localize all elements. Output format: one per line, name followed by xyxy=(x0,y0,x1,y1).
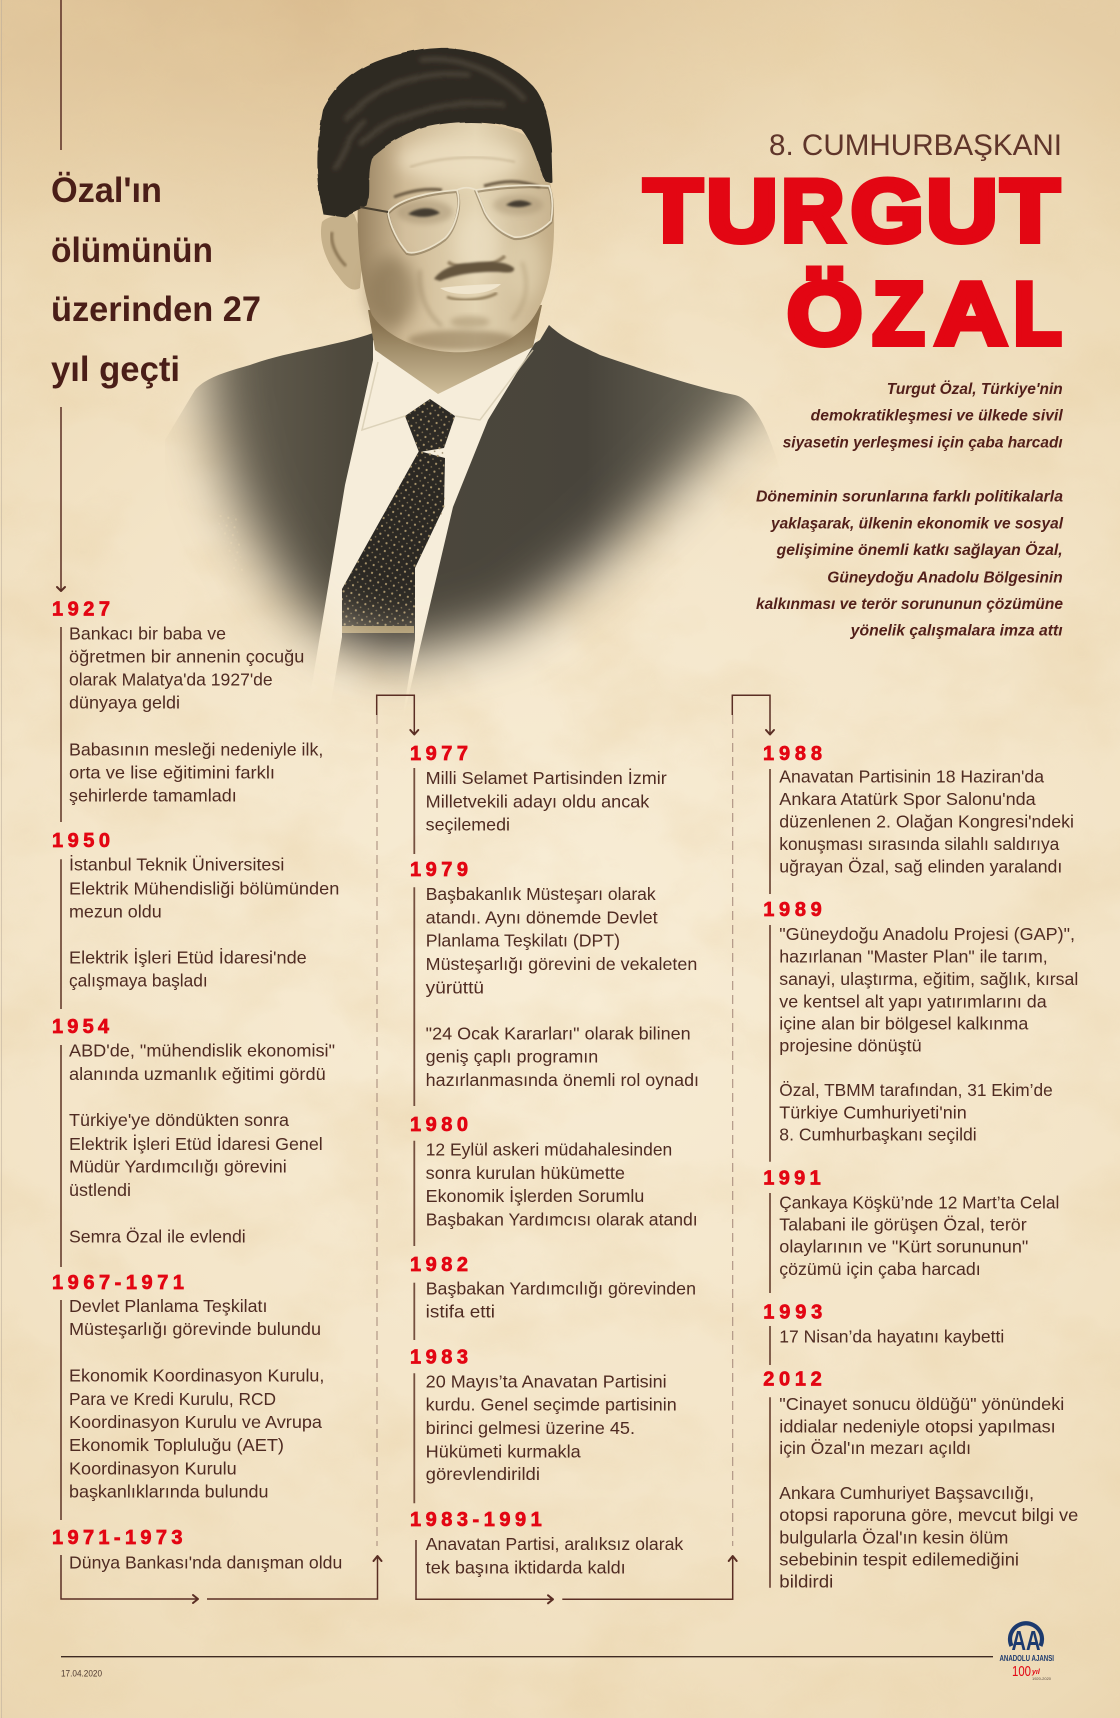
entry: 2012: 2012 xyxy=(763,1368,822,1390)
entry: 1971-1973 xyxy=(52,1527,342,1572)
entry: 1954: Türkiye'ye döndükten sonra xyxy=(69,1110,289,1130)
entry: 1982: Başbakan Yardımcılığı görevinden xyxy=(426,1278,696,1298)
text block: introduction: yaklaşarak, ülkenin ekonomik ve sosyal xyxy=(770,515,1064,532)
text block: introduction: Güneydoğu Anadolu Bölgesinin xyxy=(827,569,1063,586)
entry: 1983: kurdu. Genel seçimde partisinin xyxy=(426,1395,677,1415)
photo: mustache and mouth xyxy=(434,262,514,300)
text block: introduction: gelişimine önemli katkı sağlayan Özal, xyxy=(776,540,1063,559)
logo: Anadolu Ajansı 100 yıl: ANADOLU AJANSI xyxy=(1000,1653,1054,1663)
entry: 1991: 1991 xyxy=(763,1168,821,1190)
entry: 1927: orta ve lise eğitimini farklı xyxy=(69,763,275,783)
entry: 1991 xyxy=(763,1168,1059,1293)
text block: introduction: demokratikleşmesi ve ülkede sivil xyxy=(811,408,1063,425)
entry: 1979: Müsteşarlığı görevini de vekaleten xyxy=(426,954,697,974)
text block: introduction: kalkınması ve terör sorununun çözümüne xyxy=(756,596,1063,613)
entry: 1977: Milletvekili adayı oldu ancak xyxy=(426,791,649,811)
entry: 1954: Elektrik İşleri Etüd İdaresi Genel xyxy=(69,1134,323,1154)
entry: 1983-1991: 1983-1991 xyxy=(410,1509,542,1531)
entry: 1979: geniş çaplı programın xyxy=(426,1047,598,1067)
entry: 1988: uğrayan Özal, sağ elinden yaralandı xyxy=(779,857,1062,877)
entry: 1988: düzenlenen 2. Olağan Kongresi'ndeki xyxy=(779,812,1074,832)
entry: 1991: Çankaya Köşkü’nde 12 Mart’ta Celal xyxy=(779,1192,1059,1212)
heading: anniversary text: üzerinden 27 xyxy=(51,290,261,329)
entry: 1988: Ankara Atatürk Spor Salonu'nda xyxy=(779,789,1036,809)
entry: 1993 xyxy=(763,1302,1004,1365)
photo: face xyxy=(358,122,554,352)
entry: 1993: 17 Nisan’da hayatını kaybetti xyxy=(779,1326,1004,1346)
entry: 1988: 1988 xyxy=(763,743,822,765)
arrow: column 2 to column 3 xyxy=(416,695,774,1603)
panel: timeline column 3 xyxy=(763,743,1078,1592)
title: Turgut Özal: Ö xyxy=(787,264,862,363)
entry: 1989: ve kentsel alt yapı yatırımlarını da xyxy=(779,991,1047,1011)
entry: 1983: görevlendirildi xyxy=(426,1464,540,1484)
entry: 1971-1973: 1971-1973 xyxy=(52,1527,182,1549)
title: Turgut Özal: R xyxy=(781,161,844,260)
entry: 1989 xyxy=(763,899,1078,1162)
text block: introduction: yönelik çalışmalara imza attı xyxy=(850,623,1063,640)
title: Turgut Özal: U xyxy=(706,161,778,260)
entry: 2012: iddialar nedeniyle otopsi yapılması xyxy=(779,1416,1056,1436)
entry: 1983-1991: tek başına iktidarda kaldı xyxy=(426,1557,626,1577)
entry: 1954: üstlendi xyxy=(69,1180,131,1200)
entry: 1967-1971: Koordinasyon Kurulu ve Avrupa xyxy=(69,1412,322,1432)
entry: 1967-1971: Ekonomik Koordinasyon Kurulu, xyxy=(69,1366,324,1386)
entry: 1989: 8. Cumhurbaşkanı seçildi xyxy=(779,1125,977,1145)
heading: anniversary text: ölümünün xyxy=(51,231,213,270)
entry: 1983 xyxy=(410,1346,677,1503)
panel: timeline column 1 xyxy=(52,598,342,1572)
entry: 1954: alanında uzmanlık eğitimi gördü xyxy=(69,1064,326,1084)
entry: 1979: atandı. Aynı dönemde Devlet xyxy=(426,907,658,927)
entry: 1950: mezun oldu xyxy=(69,901,162,921)
entry: 1991: Talabani ile görüşen Özal, terör xyxy=(779,1215,1027,1235)
photo: neck xyxy=(368,305,542,394)
photo: portrait of Turgut Özal xyxy=(165,48,790,720)
entry: 1980: 1980 xyxy=(410,1114,468,1136)
entry: 1927: 1927 xyxy=(52,598,110,620)
entry: 1988: konuşması sırasında silahlı saldırıya xyxy=(779,834,1059,854)
entry: 1988: Anavatan Partisinin 18 Haziran'da xyxy=(779,767,1044,787)
entry: 1983: birinci gelmesi üzerine 45. xyxy=(426,1418,635,1438)
title: Turgut Özal: U xyxy=(926,161,998,260)
entry: 1927: öğretmen bir annenin çocuğu xyxy=(69,647,304,667)
entry: 1971-1973: Dünya Bankası'nda danışman oldu xyxy=(69,1552,342,1572)
entry: 1950: çalışmaya başladı xyxy=(69,971,208,991)
text block: introduction: siyasetin yerleşmesi için çaba harcadı xyxy=(783,435,1063,452)
heading: anniversary text xyxy=(51,171,261,389)
entry: 1967-1971: başkanlıklarında bulundu xyxy=(69,1482,268,1502)
photo: ear xyxy=(321,214,364,290)
entry: 1989: sanayi, ulaştırma, eğitim, sağlık, kırsal xyxy=(779,969,1078,989)
entry: 2012: bildirdi xyxy=(779,1572,833,1592)
entry: 1950: İstanbul Teknik Üniversitesi xyxy=(69,855,284,875)
entry: 1980: sonra kurulan hükümette xyxy=(426,1163,625,1183)
entry: 1979: Planlama Teşkilatı (DPT) xyxy=(426,931,620,951)
text block: introduction xyxy=(756,379,1064,640)
entry: 1989: içine alan bir bölgesel kalkınma xyxy=(779,1013,1028,1033)
panel: timeline column 2 xyxy=(410,743,699,1577)
entry: 1954: Müdür Yardımcılığı görevini xyxy=(69,1157,287,1177)
entry: 1950: 1950 xyxy=(52,830,110,852)
subtitle: 8. Cumhurbaşkanı: 8. CUMHURBAŞKANI xyxy=(769,129,1062,162)
entry: 1977 xyxy=(410,743,667,854)
entry: 1982 xyxy=(410,1254,696,1340)
logo: Anadolu Ajansı 100 yıl: AA xyxy=(1012,1625,1040,1656)
heading: anniversary text: yıl geçti xyxy=(51,350,180,389)
entry: 1967-1971: Müsteşarlığı görevinde bulundu xyxy=(69,1319,321,1339)
entry: 1967-1971: Ekonomik Topluluğu (AET) xyxy=(69,1435,284,1455)
logo: Anadolu Ajansı 100 yıl: yıl xyxy=(1031,1669,1041,1676)
entry: 1954 xyxy=(52,1016,335,1267)
entry: 1979: hazırlanmasında önemli rol oynadı xyxy=(426,1070,699,1090)
photo: eyebrows and eyes xyxy=(394,182,540,217)
entry: 1983: Hükümeti kurmakla xyxy=(426,1441,581,1461)
entry: 1979 xyxy=(410,859,699,1106)
entry: 1927: şehirlerde tamamladı xyxy=(69,786,237,806)
entry: 2012: bulgularla Özal'ın kesin ölüm xyxy=(779,1527,1008,1547)
title: Turgut Özal: Z xyxy=(873,264,924,363)
entry: 1993: 1993 xyxy=(763,1302,822,1324)
entry: 1977: seçilemedi xyxy=(426,814,510,834)
entry: 1980 xyxy=(410,1114,698,1246)
entry: 1980: Ekonomik İşlerden Sorumlu xyxy=(426,1186,644,1206)
entry: 2012: Ankara Cumhuriyet Başsavcılığı, xyxy=(779,1483,1034,1503)
entry: 1977: Milli Selamet Partisinden İzmir xyxy=(426,768,667,788)
title: Turgut Özal: T xyxy=(644,161,702,260)
entry: 2012: sebebinin tespit edilemediğini xyxy=(779,1550,1019,1570)
entry: 1989: Özal, TBMM tarafından, 31 Ekim’de xyxy=(779,1080,1053,1100)
title: Turgut Özal: T xyxy=(1001,161,1059,260)
title: Turgut Özal: A xyxy=(935,264,1007,363)
entry: 1988 xyxy=(763,743,1074,894)
entry: 1980: Başbakan Yardımcısı olarak atandı xyxy=(426,1209,698,1229)
entry: 1979: Başbakanlık Müsteşarı olarak xyxy=(426,884,656,904)
entry: 1954: Semra Özal ile evlendi xyxy=(69,1226,246,1246)
entry: 1989: hazırlanan "Master Plan" ile tarım, xyxy=(779,946,1048,966)
entry: 1983: 1983 xyxy=(410,1346,468,1368)
logo: Anadolu Ajansı 100 yıl xyxy=(1000,1623,1054,1681)
entry: 1967-1971: Koordinasyon Kurulu xyxy=(69,1458,237,1478)
title: Turgut Özal xyxy=(644,161,1062,363)
date: 17.04.2020 xyxy=(61,1669,102,1680)
entry: 1983-1991: Anavatan Partisi, aralıksız olarak xyxy=(426,1534,683,1554)
entry: 1979: yürüttü xyxy=(426,977,484,997)
entry: 1989: "Güneydoğu Anadolu Projesi (GAP)", xyxy=(779,924,1075,944)
entry: 1977: 1977 xyxy=(410,743,468,765)
entry: 1979: "24 Ocak Kararları" olarak bilinen xyxy=(426,1023,691,1043)
photo: glasses xyxy=(360,185,552,254)
entry: 1983: 20 Mayıs’ta Anavatan Partisini xyxy=(426,1371,667,1391)
entry: 1989: projesine dönüştü xyxy=(779,1036,922,1056)
entry: 1967-1971: 1967-1971 xyxy=(52,1272,184,1294)
entry: 1967-1971: Devlet Planlama Teşkilatı xyxy=(69,1296,267,1316)
entry: 1954: 1954 xyxy=(52,1016,110,1038)
entry: 1967-1971: Para ve Kredi Kurulu, RCD xyxy=(69,1389,276,1409)
entry: 1980: 12 Eylül askeri müdahalesinden xyxy=(426,1140,672,1160)
entry: 1991: çözümü için çaba harcadı xyxy=(779,1259,981,1279)
entry: 1967-1971 xyxy=(52,1272,324,1520)
entry: 1991: olaylarının ve "Kürt sorununun" xyxy=(779,1237,1028,1257)
connector: top line to 1927 xyxy=(57,0,65,591)
text block: introduction: Döneminin sorunlarına farklı politikalarla xyxy=(756,489,1063,506)
entry: 1989: 1989 xyxy=(763,899,822,921)
entry: 1982: 1982 xyxy=(410,1254,468,1276)
entry: 1927 xyxy=(52,598,323,822)
entry: 1950 xyxy=(52,830,339,1009)
entry: 1927: dünyaya geldi xyxy=(69,693,180,713)
photo: hair xyxy=(317,48,553,217)
title: Turgut Özal: G xyxy=(851,161,924,260)
heading: anniversary text: Özal'ın xyxy=(51,171,162,210)
entry: 1950: Elektrik İşleri Etüd İdaresi'nde xyxy=(69,947,307,967)
entry: 1950: Elektrik Mühendisliği bölümünden xyxy=(69,878,339,898)
title: Turgut Özal: L xyxy=(1013,264,1062,363)
text block: introduction: Turgut Özal, Türkiye'nin xyxy=(887,379,1063,398)
entry: 1927: Bankacı bir baba ve xyxy=(69,623,226,643)
entry: 1989: Türkiye Cumhuriyeti'nin xyxy=(779,1102,967,1122)
entry: 2012 xyxy=(763,1368,1078,1592)
entry: 2012: "Cinayet sonucu öldüğü" yönündeki xyxy=(779,1394,1064,1414)
entry: 1983-1991 xyxy=(410,1509,683,1577)
entry: 1927: Babasının mesleği nedeniyle ilk, xyxy=(69,739,323,759)
entry: 1982: istifa etti xyxy=(426,1302,495,1322)
entry: 2012: otopsi raporuna göre, mevcut bilgi ve xyxy=(779,1505,1078,1525)
logo: Anadolu Ajansı 100 yıl: 100 xyxy=(1012,1663,1031,1680)
entry: 1954: ABD'de, "mühendislik ekonomisi" xyxy=(69,1041,335,1061)
entry: 1979: 1979 xyxy=(410,859,468,881)
logo: Anadolu Ajansı 100 yıl: 1920-2020 xyxy=(1032,1676,1052,1681)
entry: 2012: için Özal'ın mezarı açıldı xyxy=(779,1438,971,1458)
arrow: column 1 to column 2 xyxy=(61,695,418,1603)
photo: suit, shirt and tie xyxy=(173,325,772,694)
entry: 1927: olarak Malatya'da 1927'de xyxy=(69,670,273,690)
